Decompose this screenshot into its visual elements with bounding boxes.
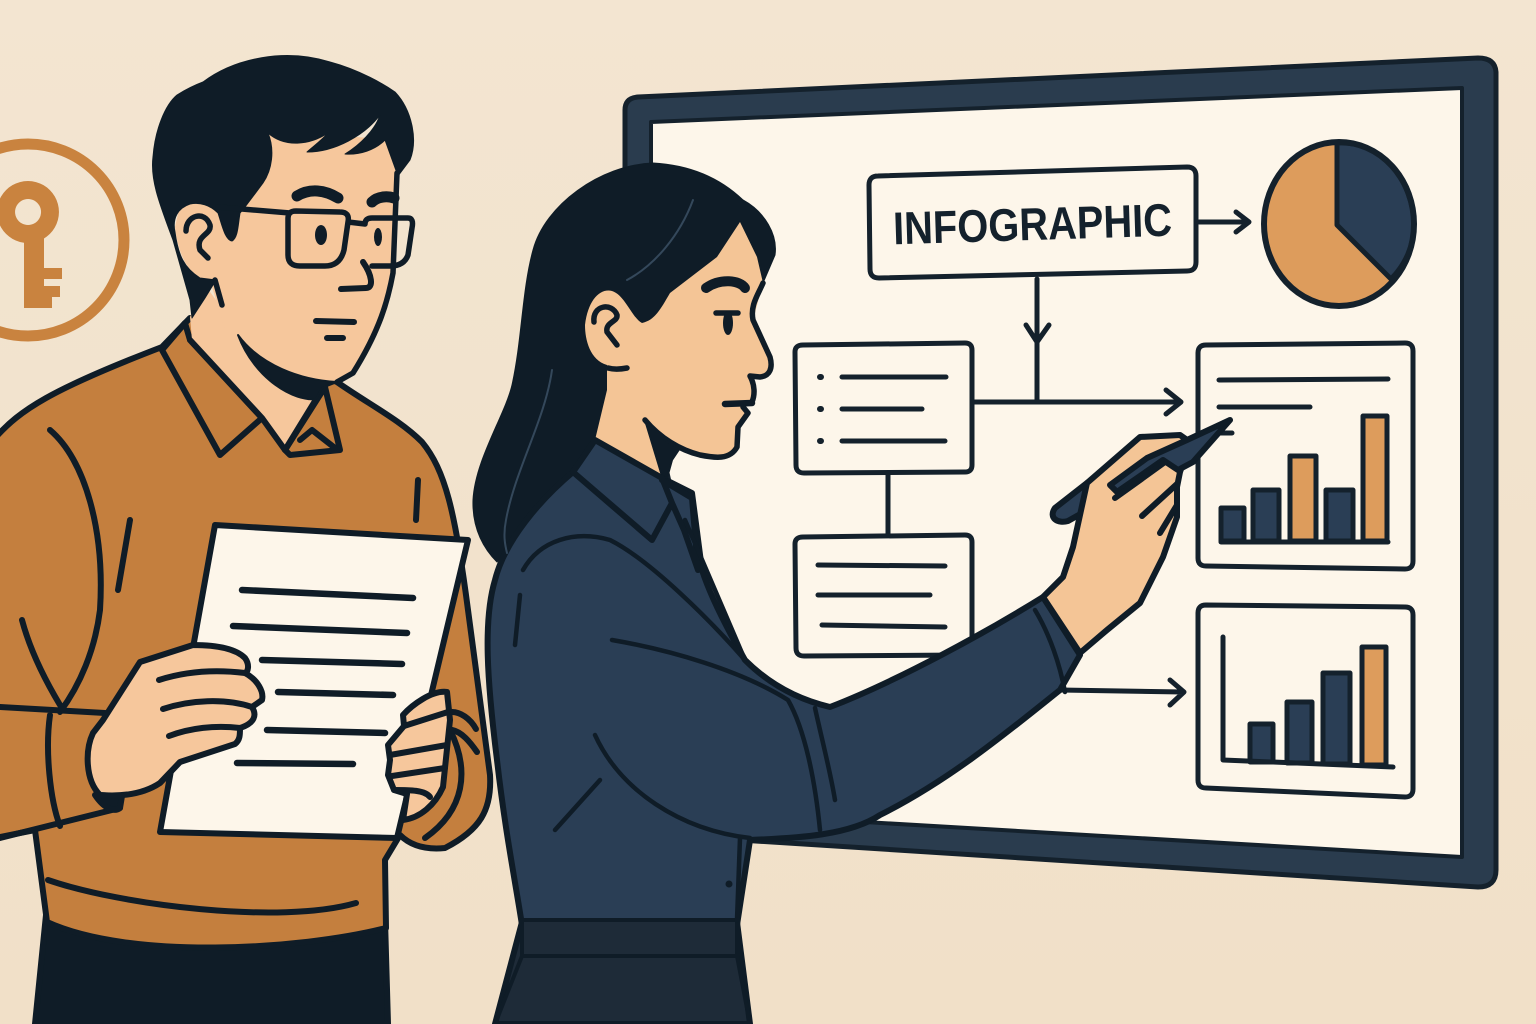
title box [869,167,1196,278]
fingers [1115,462,1177,533]
hand shape [1043,435,1190,653]
shirt button [726,880,732,888]
arrow: title to pie chart [1199,212,1249,232]
pen back end [1053,483,1087,522]
man's left hand holding paper [88,645,262,810]
neck shadow [238,335,337,399]
trousers [35,915,388,1024]
hair highlights [504,200,693,553]
collar edges [190,340,335,450]
icon: key in a circle [0,144,124,336]
panel: board diagram [795,142,1414,797]
figure: woman [473,163,1080,1024]
skirt [495,922,750,1024]
panel: presentation board frame [625,58,1496,887]
connector between list boxes [886,473,890,535]
sweater [0,318,490,948]
arrow: to lower chart [1060,680,1184,705]
title box: INFOGRAPHIC [892,194,1173,254]
eye and brow [706,281,745,288]
nose and mouth [316,262,371,338]
neck shadow [645,420,680,478]
hand holding pen [1043,420,1230,653]
shirt collar [573,440,698,570]
list box with bullets [795,343,972,473]
sweater seams [0,430,461,912]
pie chart [1264,142,1414,306]
paper document [160,525,468,838]
collar left flap [162,323,262,455]
pen [1110,420,1230,492]
neck [190,285,322,447]
arrow: title down to connector [1026,279,1049,402]
belt [495,920,750,1024]
shirt [488,472,1080,925]
face [175,130,397,382]
ear detail [594,307,617,345]
chart card: lower bar chart [1198,605,1413,797]
ear [186,216,222,305]
ear lobe line [608,368,627,369]
man's right hand holding paper [388,692,477,820]
eyes and brows [297,191,394,202]
arrow: connector to top chart [974,390,1181,414]
mouth [725,403,752,404]
chart card: top bar chart [1198,343,1413,569]
cuff blob [95,795,122,810]
text box [795,535,972,656]
collar right flap [285,387,340,455]
hair [152,56,414,318]
shirt seams [515,520,1065,920]
figure: man [0,56,490,1024]
face and neck [585,222,771,478]
hair back [473,163,775,562]
glasses [218,207,412,266]
